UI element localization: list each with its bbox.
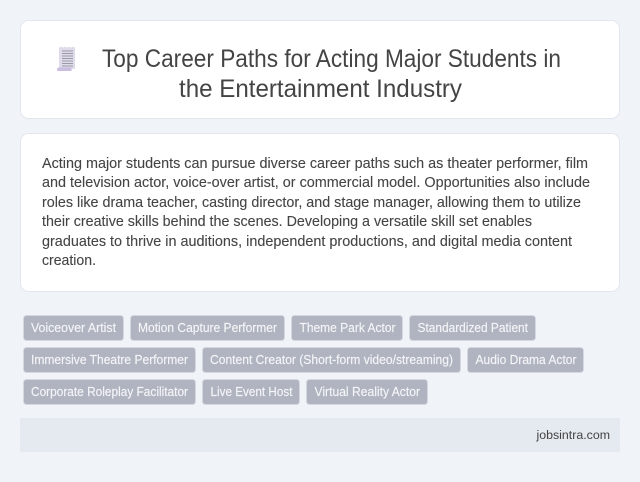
text block: description: graduates to thrive in auditions, independent productions, and digital media content: [42, 234, 572, 250]
tag: Immersive Theatre Performer: [24, 348, 196, 372]
tag: Virtual Reality Actor: [306, 380, 428, 404]
tag: Audio Drama Actor: Audio Drama Actor: [476, 353, 576, 367]
tag: Live Event Host: [202, 380, 300, 404]
tag: Corporate Roleplay Facilitator: [24, 380, 196, 404]
title: the Entertainment Industry: [179, 76, 463, 103]
tag: Live Event Host: Live Event Host: [210, 385, 293, 399]
text block: description: their creative skills behind the scenes. Developing a versatile skill set enables: [42, 214, 532, 230]
text block: description: creation.: [42, 253, 96, 269]
tag: Voiceover Artist: Voiceover Artist: [31, 321, 116, 335]
footer source text: jobsintra.com: [536, 428, 610, 442]
panel: description card: [20, 134, 620, 292]
title: Top Career Paths for Acting Major Students in: [102, 46, 561, 73]
title: [102, 46, 561, 103]
tag: Motion Capture Performer: Motion Capture Performer: [138, 321, 277, 335]
tag: Theme Park Actor: Theme Park Actor: [300, 321, 396, 335]
tag: Corporate Roleplay Facilitator: Corporate Roleplay Facilitator: [31, 385, 188, 399]
text block: description: Acting major students can pursue diverse career paths such as theater performer, film: [42, 156, 588, 172]
tag: Standardized Patient: Standardized Patient: [418, 321, 528, 335]
text block: description: [42, 156, 590, 269]
tag: Theme Park Actor: [292, 316, 402, 340]
tag: Motion Capture Performer: [130, 316, 284, 340]
panel: header card: [20, 20, 620, 118]
text block: description: roles like drama teacher, casting director, and stage manager, allowing them to utilize: [42, 195, 581, 211]
tag: Standardized Patient: [410, 316, 536, 340]
text block: description: and television actor, voice-over artist, or commercial model. Opportunities also include: [42, 175, 590, 191]
tag: Virtual Reality Actor: Virtual Reality Actor: [314, 385, 420, 399]
icon: paper scroll document: [57, 47, 75, 71]
tag: Audio Drama Actor: [468, 348, 584, 372]
tags: career paths: [24, 316, 584, 404]
tag: Content Creator: Content Creator (Short-form video/streaming): [210, 353, 453, 367]
tag: Voiceover Artist: [24, 316, 124, 340]
tag: Content Creator: [202, 348, 460, 372]
footer bar: [20, 418, 620, 452]
tag: Immersive Theatre Performer: Immersive Theatre Performer: [31, 353, 188, 367]
